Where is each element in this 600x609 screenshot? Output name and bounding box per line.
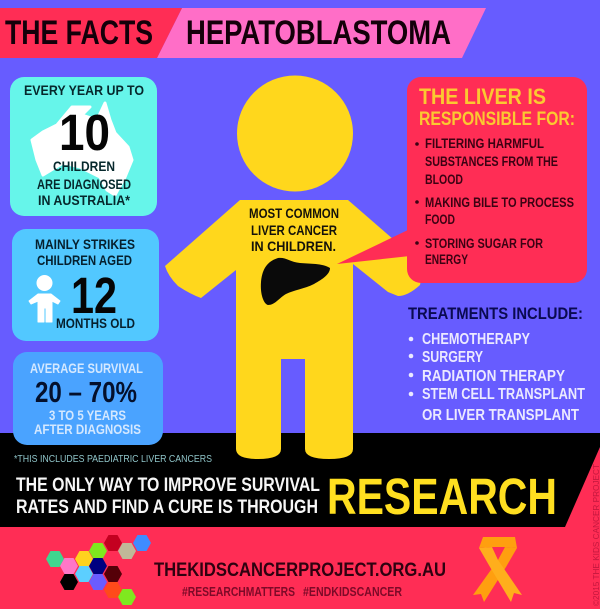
text: months old: MONTHS OLD: [56, 315, 135, 331]
text: most common liver cancer in children: IN CHILDREN.: [251, 238, 336, 254]
panel: diagnosed each year: [10, 77, 157, 216]
icon: hexagon logo: [46, 535, 151, 605]
icon: child: [29, 275, 60, 322]
hashtags: [182, 584, 402, 599]
header banner: [0, 8, 486, 58]
list: liver functions: FOOD: [425, 212, 455, 227]
list: liver functions: SUBSTANCES FROM THE: [425, 154, 558, 169]
call to action text: [16, 475, 320, 518]
panel: age: [12, 229, 159, 341]
text: mainly strikes children aged: CHILDREN AGED: [37, 252, 132, 268]
list: treatments: OR LIVER TRANSPLANT: [422, 407, 579, 424]
call to action text: THE ONLY WAY TO IMPROVE SURVIVAL: [16, 475, 320, 496]
heading: hepatoblastoma: HEPATOBLASTOMA: [186, 14, 451, 52]
panel: treatments: [408, 304, 585, 424]
list: liver functions: STORING SUGAR FOR: [425, 236, 543, 251]
icon: map of Australia: [32, 103, 132, 195]
footer panel: [0, 447, 600, 609]
list: treatments: [409, 331, 585, 424]
text: every year up to: EVERY YEAR UP TO: [24, 82, 144, 98]
text: 3 to 5 years after diagnosis: AFTER DIAGNOSIS: [34, 421, 141, 437]
hashtags: #ENDKIDSCANCER: [303, 584, 402, 599]
number: 20 to 70 percent: 20 – 70%: [35, 377, 137, 409]
footnote: *THIS INCLUDES PAEDIATRIC LIVER CANCERS: [14, 453, 212, 465]
list: liver functions: ENERGY: [425, 252, 468, 267]
website address: THEKIDSCANCERPROJECT.ORG.AU: [154, 560, 446, 581]
icon: liver: [261, 258, 330, 305]
icon: awareness ribbon: [473, 537, 522, 602]
text: mainly strikes children aged: [35, 236, 135, 268]
call to action text: RATES AND FIND A CURE IS THROUGH: [16, 497, 318, 518]
text: children are diagnosed in Australia: [37, 158, 131, 208]
text: most common liver cancer in children: MOST COMMON: [249, 205, 339, 221]
text: 3 to 5 years after diagnosis: 3 TO 5 YEARS: [49, 407, 126, 423]
panel: liver functions callout: [337, 77, 587, 283]
black research band: [0, 433, 600, 527]
heading: the facts: THE FACTS: [5, 14, 153, 52]
number: 10: 10: [59, 104, 110, 161]
heading: the liver is responsible for: [419, 84, 575, 130]
figure body: [165, 200, 424, 459]
figure head: [237, 76, 353, 192]
list: treatments: SURGERY: [422, 349, 484, 366]
list: treatments: CHEMOTHERAPY: [422, 331, 531, 348]
list: liver functions: FILTERING HARMFUL: [425, 136, 544, 151]
number: 12: 12: [71, 267, 117, 324]
text: most common liver cancer in children: LIVER CANCER: [251, 222, 337, 238]
header pink segment: [157, 8, 486, 58]
hashtags: #RESEARCHMATTERS: [182, 584, 295, 599]
list: liver functions: BLOOD: [425, 172, 463, 187]
callout pointer: [337, 229, 410, 264]
text: average survival: AVERAGE SURVIVAL: [30, 360, 143, 376]
text: mainly strikes children aged: MAINLY STRIKES: [35, 236, 135, 252]
heading: the liver is responsible for: THE LIVER IS: [419, 84, 546, 109]
text: children are diagnosed in Australia: CHILDREN: [53, 158, 115, 174]
text: children are diagnosed in Australia: IN AUSTRALIA*: [38, 192, 130, 208]
text: most common liver cancer in children: [249, 205, 339, 254]
panel: survival: [13, 352, 163, 445]
list: treatments: RADIATION THERAPY: [422, 368, 566, 385]
text: children are diagnosed in Australia: ARE DIAGNOSED: [37, 176, 131, 192]
text: 3 to 5 years after diagnosis: [34, 407, 141, 437]
list: liver functions: [415, 136, 574, 267]
header red segment: [0, 8, 182, 58]
child figure: [165, 76, 424, 459]
